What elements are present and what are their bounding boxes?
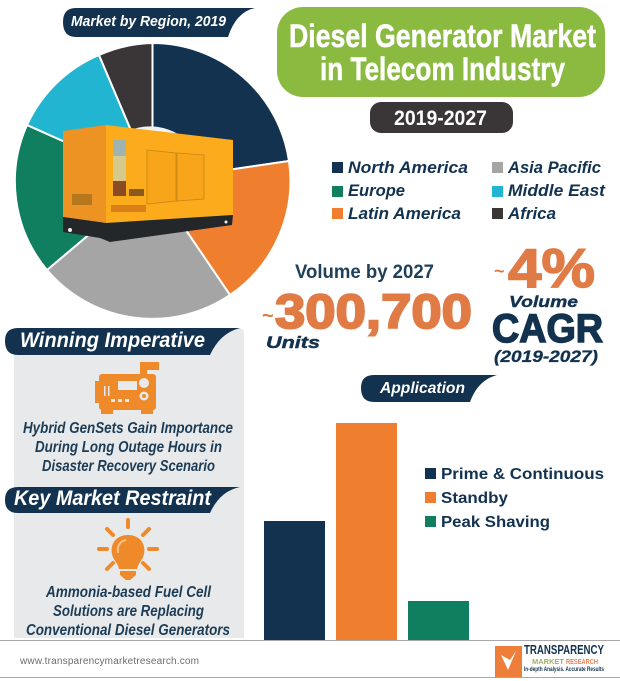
logo: transparency market research (495, 642, 605, 677)
region legend: North America (348, 159, 468, 177)
region legend: Europe (348, 182, 405, 200)
label: application: Application (379, 380, 465, 397)
text: winning imperative: During Long Outage Hours in (35, 439, 222, 456)
application legend (425, 466, 604, 531)
CAGR stat: ~ (494, 261, 505, 281)
region legend: Middle East (508, 182, 607, 200)
pie chart: market by region (15, 43, 290, 319)
CAGR stat: 4% (508, 237, 595, 299)
region legend: Africa (507, 205, 556, 223)
year range pill: 2019-2027 (394, 107, 487, 130)
CAGR stat: Volume (509, 294, 578, 311)
panel: winning imperative and restraint (5, 328, 244, 639)
region legend (332, 159, 607, 223)
application legend: Prime & Continuous (441, 466, 604, 483)
volume by 2027 stat (262, 262, 472, 352)
CAGR stat: (2019-2027) (494, 348, 599, 366)
volume by 2027 stat: 300,700 (275, 286, 472, 339)
text: key market restraint: Ammonia-based Fuel Cell (45, 584, 212, 601)
icon: generator (95, 362, 159, 414)
text: winning imperative: Hybrid GenSets Gain Importance (23, 420, 233, 437)
label: market by region (63, 8, 255, 37)
region legend: Asia Pacific (507, 159, 601, 177)
icon: light bulb (99, 520, 157, 580)
label: market by region: Market by Region, 2019 (71, 14, 226, 30)
heading: winning imperative: Winning Imperative (20, 329, 205, 352)
application legend: Peak Shaving (441, 514, 550, 531)
title: in Telecom Industry (320, 51, 565, 87)
volume by 2027 stat: Units (266, 334, 320, 352)
year range pill (370, 102, 513, 133)
CAGR stat: CAGR (492, 307, 603, 351)
volume by 2027 stat: Volume by 2027 (295, 262, 434, 283)
logo: transparency market research: MARKET (532, 659, 565, 666)
volume by 2027 stat: ~ (262, 305, 274, 327)
CAGR stat (492, 237, 603, 366)
text: winning imperative: Disaster Recovery Scenario (42, 458, 215, 475)
generator illustration (63, 125, 233, 242)
text: winning imperative (23, 420, 233, 475)
label: application (361, 375, 497, 402)
heading: key market restraint: Key Market Restraint (14, 487, 212, 510)
footer: www.transparencymarketresearch.com (19, 656, 199, 667)
region legend: Latin America (348, 205, 461, 223)
text: key market restraint: Solutions are Replacing (53, 603, 204, 620)
application legend: Standby (441, 490, 508, 507)
title (277, 7, 605, 97)
text: key market restraint (26, 584, 230, 639)
bar chart: application (264, 423, 469, 640)
text: key market restraint: Conventional Diesel Generators (26, 622, 230, 639)
logo: transparency market research: RESEARCH (566, 659, 598, 666)
